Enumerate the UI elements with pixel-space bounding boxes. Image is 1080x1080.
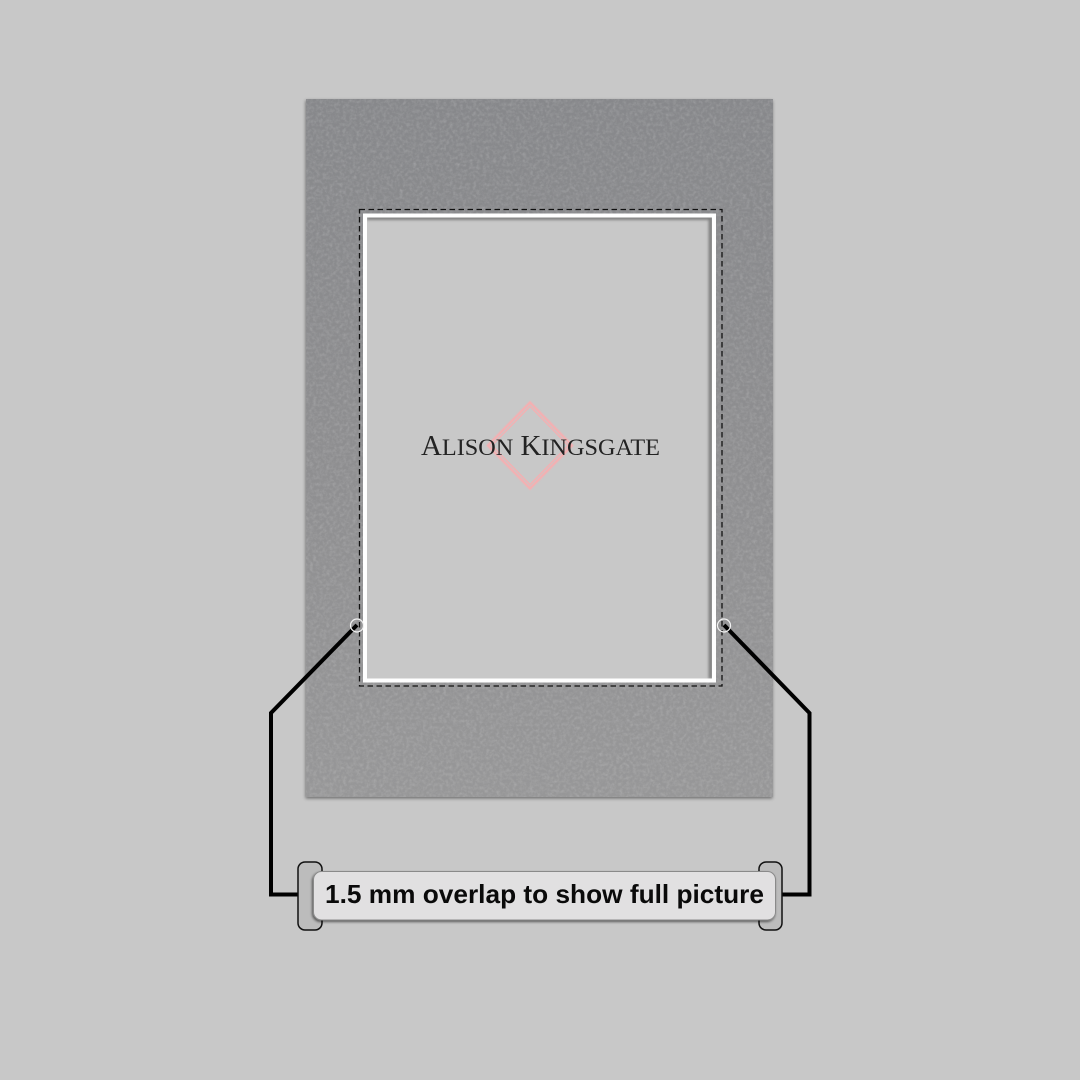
- panel: grey mat board: [306, 99, 773, 797]
- infographic canvas: [269, 98, 812, 931]
- right bracket tab: [759, 862, 782, 930]
- logo wordmark: ALISON KINGSGATE: [421, 431, 660, 462]
- logo: Alison Kingsgate: [421, 402, 660, 488]
- label text: 1.5 mm overlap to show full picture: [325, 879, 764, 909]
- picture window with white border: [365, 215, 714, 680]
- dashed overlap outline: [360, 210, 722, 686]
- icon: pink diamond: [488, 402, 572, 488]
- right leader line and marker: [718, 619, 810, 894]
- left leader line and marker: [271, 619, 364, 894]
- left bracket tab: [298, 862, 322, 930]
- label box: [314, 872, 776, 920]
- callout label: [298, 862, 782, 930]
